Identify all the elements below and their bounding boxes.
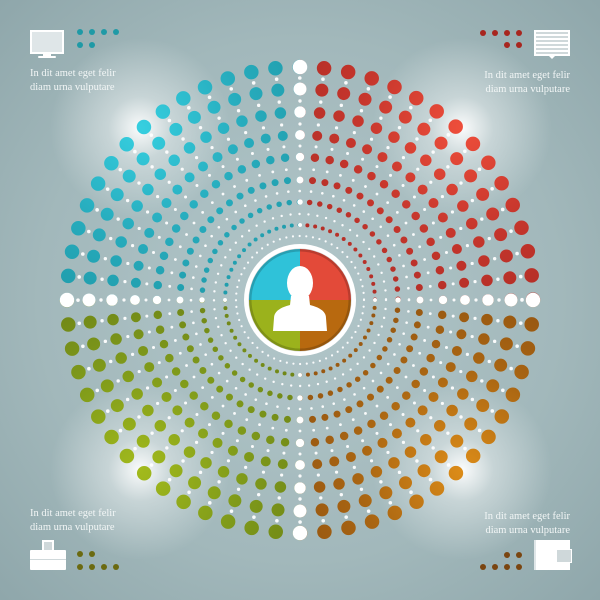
text: top left <box>30 68 116 93</box>
text: top left: In dit amet eget felir <box>30 68 116 79</box>
text: bottom left <box>30 508 116 533</box>
icon: person <box>273 266 327 331</box>
text: bottom right <box>484 511 570 536</box>
text: bottom right: In dit amet eget felir <box>484 511 570 522</box>
background glows <box>50 38 552 560</box>
text: top left: diam urna vulputare <box>30 82 115 93</box>
white axis dots <box>60 60 540 540</box>
dots: teal <box>77 29 119 48</box>
text: bottom left: diam urna vulputare <box>30 522 115 533</box>
icon: wallet <box>534 540 572 570</box>
dots: olive <box>77 551 119 570</box>
icon: briefcase <box>30 540 66 570</box>
icon: document <box>534 30 570 59</box>
text: top right <box>484 70 570 95</box>
icon: monitor <box>30 30 64 58</box>
text: top right: In dit amet eget felir <box>484 70 570 81</box>
quadrant: red dots <box>300 60 540 300</box>
dots: brown <box>480 552 522 570</box>
text: top right: diam urna vulputare <box>485 84 570 95</box>
quadrant: brown dots <box>300 300 540 540</box>
white small dot rings <box>78 78 522 522</box>
main radial dot chart <box>60 51 540 547</box>
quadrant: green dots <box>60 300 300 540</box>
center badge <box>244 244 356 356</box>
quadrant: cyan dots <box>60 60 300 300</box>
text: bottom left: In dit amet eget felir <box>30 508 116 519</box>
text: bottom right: diam urna vulputare <box>485 525 570 536</box>
dots: red <box>480 30 522 48</box>
